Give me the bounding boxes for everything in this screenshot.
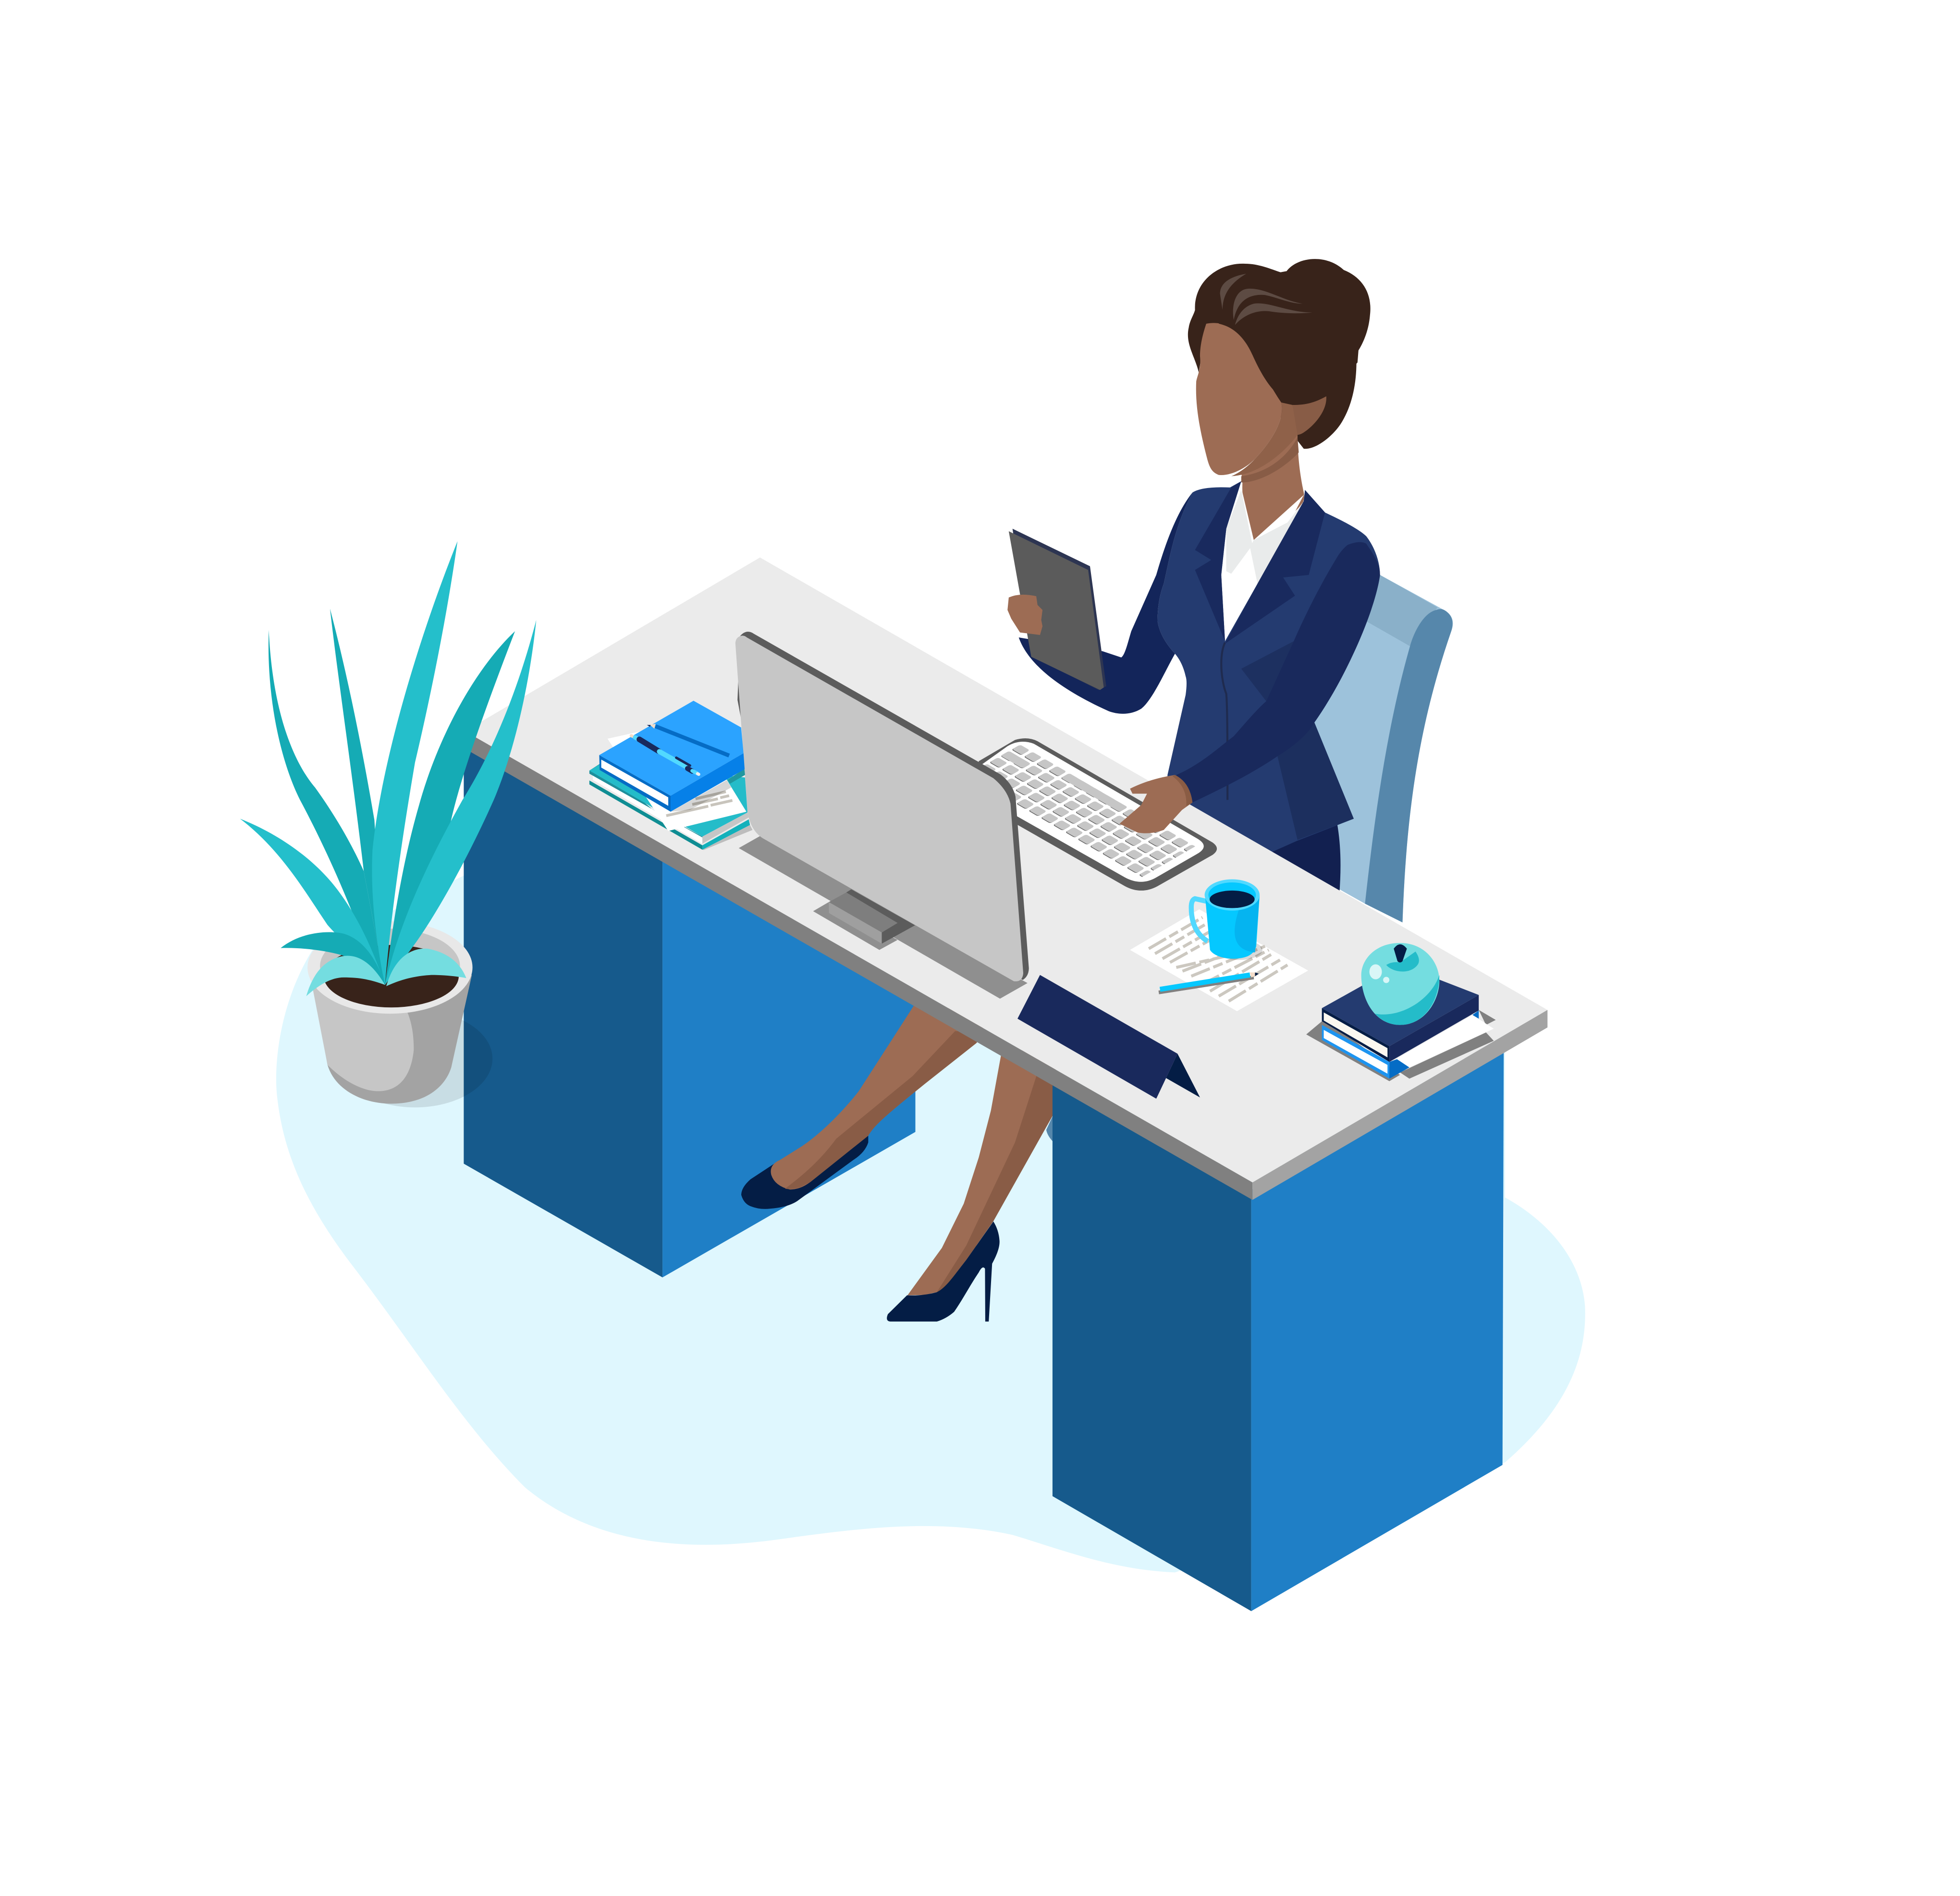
hair highlights [1220,274,1312,325]
background blob [276,875,1585,1572]
left desk pedestal [464,737,915,1277]
neck shadow [1241,438,1299,482]
paper sheet [608,731,747,831]
books and papers left [589,701,752,850]
far leg shading [785,1031,988,1189]
book shadow on paper [671,780,731,812]
monitor [735,632,1029,999]
chair base hint [1046,1113,1054,1142]
left sleeve [1019,492,1192,714]
keyboard [965,738,1217,891]
upper book [1322,1008,1389,1062]
skirt [1250,819,1340,893]
hair back [1188,259,1371,449]
tablet [1009,531,1104,690]
jacket lower fold [1277,722,1354,840]
monitor edge [737,632,1029,980]
hair front [1219,269,1362,404]
soil [324,945,459,1007]
bottom book cover [589,781,702,850]
name plate [1017,975,1200,1099]
chair [1046,575,1453,1142]
tablet edge [1013,529,1106,690]
jacket [1157,481,1380,856]
shirt [1221,488,1304,644]
jacket seam [1221,642,1227,800]
plant pot [307,921,473,1104]
books and apple right [1306,943,1496,1081]
book white pages [593,776,702,844]
tablet hand [1007,595,1042,635]
person legs and shoes [741,1000,1056,1321]
near leg [907,1044,1056,1295]
far shoe [741,1136,868,1209]
coffee [1210,891,1255,908]
document on desk [1130,909,1308,1011]
right desk pedestal [1053,1044,1504,1611]
pencil [1159,972,1259,992]
navy pen [631,736,699,774]
desk top [465,557,1547,1200]
blue pencil [647,724,729,756]
collar right [1250,501,1304,584]
neck [1241,431,1304,540]
white paper under books [1396,1015,1494,1067]
far leg [771,1000,988,1189]
collar left [1226,490,1252,574]
top teal book [589,764,702,837]
monitor back [735,636,1023,981]
apple [1361,943,1439,1025]
left lapel [1195,481,1241,641]
monitor shadow [739,836,1028,999]
stand base shadow [813,902,897,950]
paper lines [666,792,733,816]
blue book [599,755,671,812]
near shoe [887,1222,1000,1321]
plant leaves [240,541,536,996]
face [1196,323,1282,475]
jacket side shadow [1241,641,1294,701]
person body [1007,259,1380,893]
ear shading [1293,396,1326,435]
lower book [1322,1025,1389,1079]
book shadows [1306,1019,1400,1081]
arm and hand on keyboard [1119,542,1380,833]
stand [846,889,915,944]
near leg shading [937,1063,1056,1292]
teal shadow strip [727,769,745,783]
face shade [1231,403,1298,476]
right lapel [1225,490,1325,644]
mug [1191,880,1262,960]
plant shadow [338,1010,492,1107]
